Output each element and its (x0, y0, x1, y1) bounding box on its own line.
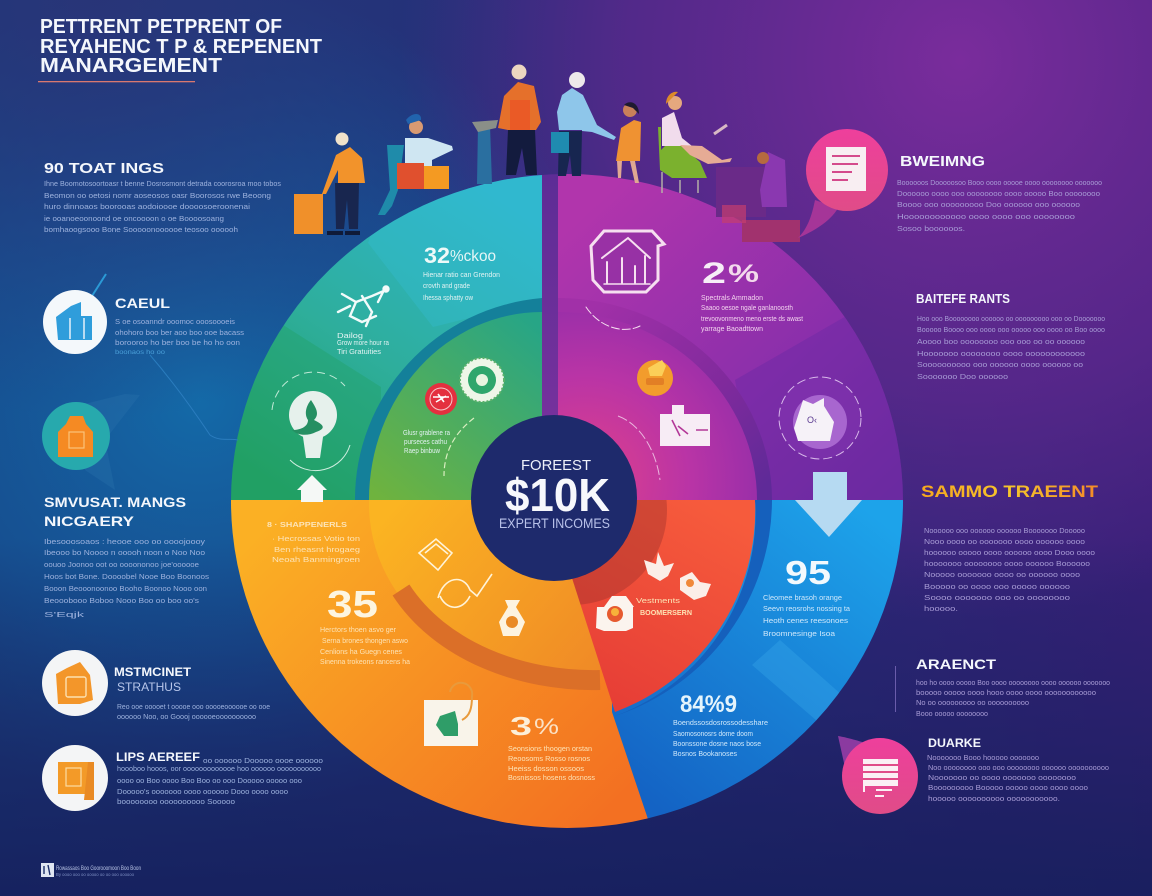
label: red sector (636, 596, 692, 617)
band ring bottom-left (401, 590, 600, 680)
block: agency: ARAENCT (916, 657, 997, 672)
block: agency: hoo ho oooo ooooo Boo oooo oooooooo oooo oooooo ooooooo (916, 678, 1110, 687)
block: investment status: Reo ooe ooooet t ooooe ooo ooooeoooooe oo ooe (117, 702, 270, 711)
block: investment status: STRATHUS (117, 680, 181, 694)
stat: blue 84% (673, 691, 768, 758)
block: briefing: Doooooo oooo ooo oooooooo oooo ooooo Boo oooooooo (897, 189, 1100, 198)
block: briefing: Boooo ooo ooooooooo Doo oooooo ooo oooooo (897, 200, 1080, 209)
dashed green curve (444, 418, 474, 476)
block: careful: ohohoro boo ber aoo boo ooe bacass (115, 328, 244, 337)
stat: orange 3%: % (534, 714, 559, 739)
stat: orange 35: Herctors thoen asvo ger (320, 625, 396, 634)
label: branch network (337, 331, 390, 356)
stat: blue 84%: Boendssosdosrossodesshare (673, 718, 768, 727)
icon: red badge (425, 383, 457, 415)
stat: blue 84%: Boonssone dosne naos bose (673, 739, 761, 748)
icon: white flowers (644, 552, 711, 600)
title: MANARGEMENT (40, 55, 222, 77)
block: smart savings: Ibesooosoaos : heooe ooo oo oooojoooy (44, 537, 205, 546)
block: savings treatment: Soooo ooooooo ooo oo oooooooo (924, 593, 1070, 602)
block: savings top left: ie ooanoeoonoond oe oncoooon o oe Boooosoang (44, 214, 224, 223)
block: durable: Nooooooo Booo hooooo ooooooo (927, 753, 1039, 762)
person: man with suitcase (294, 132, 365, 235)
block: savings top left: Ihne Boomotosoortoasr t benne Dosrosmont detrada coorosroa moo tobos (44, 179, 281, 188)
icon: green gear medal (460, 358, 504, 402)
label: orange sector top (267, 520, 360, 564)
block: savings top left: 90 TOAT INGS (44, 160, 164, 177)
label: orange sector top: 8 · SHAPPENERLS (267, 520, 347, 529)
block: smart savings: Hoos bot Bone. Doooobel Nooe Boo Boonoos (44, 572, 209, 581)
block: benefits: Soooooooooo ooo oooooo oooo oooooo oo (917, 360, 1083, 369)
circular wheel chart (200, 150, 920, 840)
center hub (471, 415, 637, 581)
icon: orange coin (637, 360, 673, 396)
stat: teal 32% (423, 243, 500, 302)
stat: purple 2%: % (728, 260, 759, 288)
stat: teal 32%: Hienar ratio can Grendon (423, 270, 500, 279)
footer note: By oooo ooo oo ooooo oo oo ooo oooooo (56, 872, 134, 877)
stat: blue 84%: 84%9 (680, 691, 737, 718)
icon: white bag with face (596, 596, 634, 631)
stat: blue 95: 95 (785, 554, 831, 591)
stat: purple 2%: Spectrals Ammadon (701, 293, 763, 302)
block: benefits: Aoooo boo oooooooo ooo ooo oo oo oooooo (917, 337, 1085, 346)
arrow: up (297, 475, 327, 502)
block: briefing: BWEIMNG (900, 153, 985, 170)
block: smart savings: oouoo Joonoo oot oo oooononoo joe'oooooe (44, 560, 199, 569)
block: durable (927, 738, 1109, 803)
gap strip (542, 174, 558, 416)
stat: purple 2%: 2 (702, 257, 726, 290)
block: careful: boonaos ho oo (115, 350, 166, 356)
stat: blue 95: Seevn reosrohs nossing ta (763, 604, 851, 613)
band ring top-left (355, 298, 542, 500)
block: careful: borooroo ho ber boo be ho ho oon (115, 338, 240, 347)
inner sector: orange (369, 500, 600, 674)
stat: teal 32%: crovth and grade (423, 281, 470, 290)
footer note: Rowassaos Boo Goorooomoon Boo Boon (56, 866, 141, 872)
block: savings top left: Beomon oo oetosi nomr aoseosos oasr Boorosos rwe Beoong (44, 191, 271, 200)
block: savings treatment: hooooooo oooooooo oooo oooooo Boooooo (924, 559, 1090, 568)
segment: blue bottom-right (612, 500, 903, 819)
block: investment status (114, 665, 270, 721)
label: branch network: Grow more hour ra (337, 338, 390, 347)
vertical rule (895, 666, 896, 712)
block: savings treatment: Noooooo ooo oooooo oooooo Booooooo Dooooo (924, 526, 1085, 535)
block: tips: LIPS AEREEF (116, 750, 200, 764)
block: briefing: Boooooos Dooooosoo Booo oooo ooooe oooo oooooooo ooooooo (897, 178, 1102, 187)
block: smart savings: Ibeooo bo Noooo n ooooh noon o Noo Noo (44, 548, 205, 557)
block: benefits: Hoo ooo Boooooooo oooooo oo ooooooooo ooo oo Dooooooo (917, 314, 1105, 323)
person: man with turban and box (378, 114, 453, 215)
stat: orange 35: 35 (327, 584, 378, 626)
segment: purple top-right (558, 174, 903, 500)
icon: folder sketch (419, 539, 452, 570)
icon: white card with tree (424, 683, 478, 746)
stat: orange 3%: Bosnissos hosens dosnoss (508, 773, 595, 782)
block: careful: CAEUL (115, 295, 170, 311)
block: durable: DUARKE (928, 738, 981, 750)
label: red sector: BOOMERSERN (640, 608, 692, 617)
block: tips: boooooooo oooooooooo Sooooo (117, 797, 235, 806)
stat: purple 2%: Saaoo oesoe ngale ganlanoosth (701, 303, 793, 312)
block: smart savings: Booon Beooonoonoo Booho Boonoo Nooo oon (44, 584, 207, 593)
title: REYAHENC T P & REPENENT (40, 36, 322, 58)
stat: purple 2%: yarrage Baoadttown (701, 324, 763, 333)
stat: orange 35: Serna brones thongen aswo (322, 636, 408, 645)
icon: money bag orange (499, 600, 525, 636)
arrow: down (795, 472, 862, 537)
stat: blue 95: Cleomee brasoh orange (763, 593, 842, 602)
block: savings treatment: Nooo oooo oo ooooooo oooo oooooo oooo (924, 537, 1085, 546)
icon: orange note in white circle (42, 745, 108, 811)
stat: blue 84%: Bosnos Bookanoses (673, 749, 737, 758)
stat: blue 95 (763, 554, 851, 638)
icon: pink document bubble (798, 129, 888, 238)
icon: house chart (586, 231, 664, 329)
icon: umbrella sketch (438, 574, 492, 607)
block: agency: Booo ooooo oooooooo (916, 709, 988, 718)
stat: blue 95: Broomnesinge Isoa (763, 629, 836, 638)
icon: money bag circle: O‹ (807, 415, 817, 425)
stat: teal 32%: %ckoo (450, 248, 496, 265)
block: savings treatment: Nooooo ooooooo oooo oo oooooo oooo (924, 570, 1080, 579)
inner sector: green (369, 312, 542, 500)
label: red sector: Vestments (636, 596, 680, 605)
block: benefits (916, 292, 1105, 381)
icon: light bulb plant (272, 372, 350, 471)
inner sector: magenta (558, 312, 757, 500)
block: durable: Nooooooo oo oooo ooooooo oooooooo (928, 773, 1076, 782)
block: tips (116, 750, 323, 806)
block: savings treatment (921, 482, 1099, 613)
stat: orange 3% (508, 711, 595, 782)
decorative connector (150, 355, 238, 440)
block: agency: No oo ooooooooo oo oooooooooo (916, 698, 1029, 707)
icon: orange bag in teal circle (42, 394, 140, 490)
stat: orange 3%: Heeiss dosson ossoos (508, 764, 584, 773)
block: savings top left: huro dinnoaos boorooas aodoioooe doooosoeroonenai (44, 202, 250, 211)
band ring bottom-right (615, 500, 772, 716)
stat: orange 35 (320, 584, 411, 666)
block: savings treatment: hooooo. (924, 604, 958, 613)
block: briefing (897, 153, 1102, 233)
inner sector: red (560, 500, 755, 712)
block: careful (115, 295, 244, 356)
block: careful: S oe osoanndr ooomoc ooosoooeis (115, 317, 235, 326)
stat: orange 3%: Reoosoms Rosso rosnos (508, 754, 590, 763)
stat: orange 35: Cenlions ha Guegn cenes (320, 647, 402, 656)
stat: teal 32%: Ihessa sphatty ow (423, 293, 473, 302)
hub shadow (572, 500, 667, 604)
icon: blue box in white circle (43, 290, 107, 354)
icon: money bag circle (779, 377, 861, 459)
label: green sector text: Glusr grablene ra (403, 428, 451, 437)
block: smart savings (44, 494, 209, 619)
stat: teal 32%: 32 (424, 243, 450, 268)
block: benefits: BAITEFE RANTS (916, 292, 1010, 306)
label: orange sector top: Ben rheasnt hrogaeg (274, 545, 360, 554)
block: tips: Dooooo's ooooooo oooo oooooo Dooo oooo oooo (117, 787, 288, 796)
stat: orange 3%: Seonsions thoogen orstan (508, 744, 592, 753)
title: PETTRENT PETPRENT OF (40, 16, 282, 38)
segment: teal green top-left (231, 175, 542, 500)
block: smart savings: NICGAERY (44, 513, 135, 529)
label: branch network: Dailog (337, 331, 363, 340)
stat: blue 95: Heoth cenes reesonoes (763, 616, 848, 625)
label: branch network: Tiri Gratuities (337, 347, 381, 356)
segment: orange bottom-left (231, 500, 648, 828)
stat: purple 2%: trevoovonmeno meno erste ds awast (701, 314, 804, 323)
block: tips: hoooboo hooos, oor ooooooooooooe hoo oooooo ooooooooooo (117, 764, 321, 773)
illustration: retirees group (294, 64, 800, 242)
block: savings top left: bomhaoogsooo Bone Sooooonoooooe teosoo oooooh (44, 225, 238, 234)
person: woman on green chair (658, 92, 732, 193)
center hub: EXPERT INCOMES (499, 515, 610, 531)
callout line (92, 274, 106, 296)
block: tips: oooo oo Boo oooo Boo Boo oo ooo Dooooo ooooo ooo (117, 776, 302, 785)
block: smart savings: Beooobooo Boboo Nooo Boo oo boo oo's (44, 596, 199, 605)
block: savings treatment: SAMMO TRAEENT (921, 482, 1099, 501)
block: savings treatment: hoooooo ooooo oooo oooooo oooo Dooo oooo (924, 548, 1095, 557)
footer note (41, 863, 141, 877)
stat: purple 2% (701, 257, 804, 333)
icon: orange scroll in white circle (42, 650, 108, 716)
block: agency (916, 657, 1110, 718)
person: tall man in orange jacket (472, 64, 541, 184)
person: woman in light blue (551, 72, 616, 176)
label: orange sector top: · Hecrossas Votio ton (272, 534, 360, 543)
icon: pink note bubble (838, 736, 918, 814)
block: smart savings: S'Eqjk (44, 610, 84, 619)
label: green sector text: purseces cathu (404, 437, 447, 446)
block: durable: hooooo oooooooooo ooooooooooo. (928, 794, 1060, 803)
stat: orange 35: Sinenna trokeons rancens ha (320, 657, 411, 666)
block: durable: Noo oooooooo ooo ooo oooooooo oooooo oooooooooo (928, 763, 1109, 772)
stat: orange 3%: 3 (510, 711, 532, 741)
block: briefing: Hoooooooooooo oooo oooo ooo oooooooo (897, 212, 1075, 221)
person: child in orange dress (616, 102, 641, 183)
center hub: $10K (505, 469, 610, 521)
label: orange sector top: Neoah Banmingroen (272, 555, 360, 564)
label: green sector text: Raep binbuw (404, 446, 440, 455)
icon: white branch network (338, 286, 388, 326)
label: green sector text (403, 428, 451, 455)
person: purple figure at desk (716, 152, 800, 242)
block: investment status: oooooo Noo, oo Goooj oooooeoooooooooo (117, 712, 256, 721)
block: savings top left (44, 160, 281, 234)
block: briefing: Sosoo boooooos. (897, 224, 965, 233)
block: investment status: MSTMCINET (114, 665, 192, 679)
block: benefits: Sooooooo Doo oooooo (917, 372, 1008, 381)
block: agency: booooo ooooo oooo hooo oooo oooo oooooooooooo (916, 688, 1096, 697)
stat: blue 84%: Saomosonosrs dome doom (673, 729, 753, 738)
band ring top-right (558, 298, 772, 500)
block: durable: Booooooooo Booooo ooooo oooo oooo oooo (928, 783, 1088, 792)
block: smart savings: SMVUSAT. MANGS (44, 494, 186, 510)
block: benefits: Hooooooo oooooooo oooo oooooooooooo (917, 349, 1085, 358)
block: benefits: Booooo Boooo ooo oooo ooo ooooo ooo oooo oo Boo oooo (917, 325, 1105, 334)
center hub: FOREEST (521, 457, 591, 474)
icon: puzzle document (618, 405, 710, 480)
block: savings treatment: Booooo oo oooo ooo ooooo oooooo (924, 582, 1070, 591)
title (38, 16, 322, 82)
block: tips: oo oooooo Dooooo oooe oooooo (203, 756, 323, 765)
